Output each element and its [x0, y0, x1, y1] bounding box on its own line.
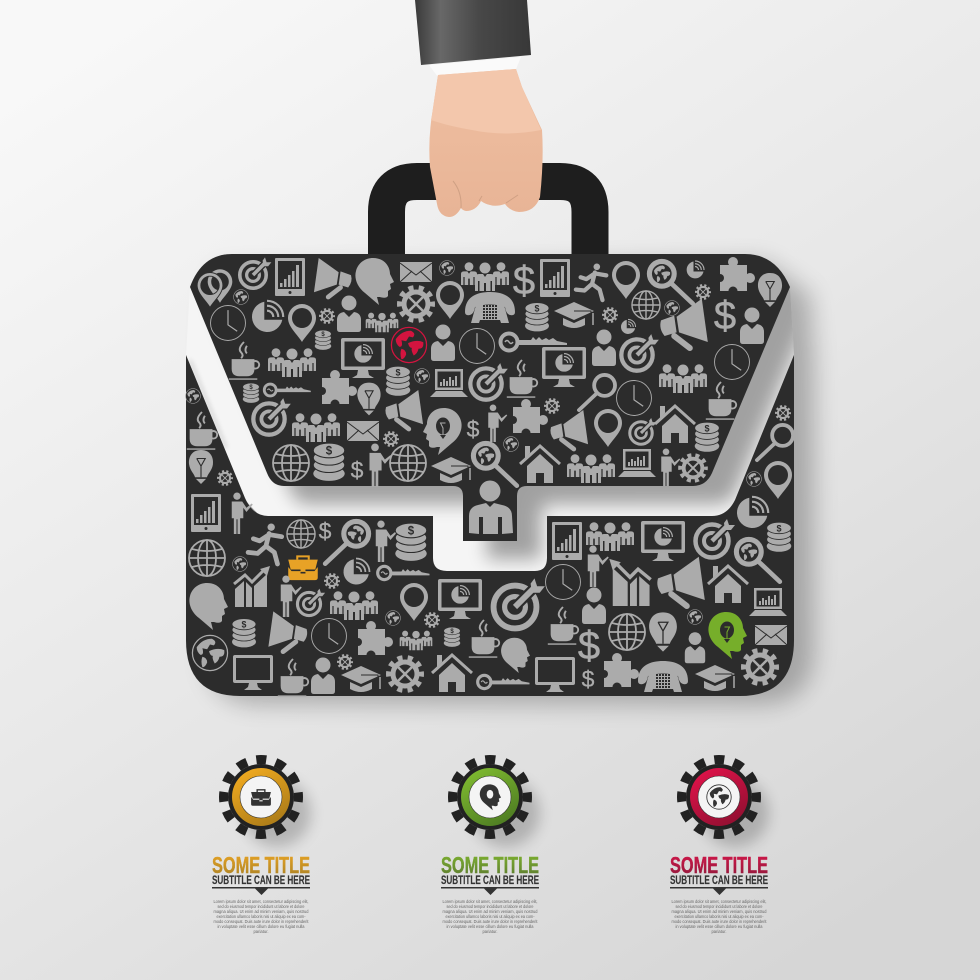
text block: orange	[214, 899, 309, 934]
icon: small gear	[320, 309, 334, 323]
icon: person	[337, 296, 361, 332]
text block: orange: modo consequat. Duis aute irure dolor in reprehenderit	[214, 919, 309, 924]
text block: green: magna aliqua. Ut enim ad minim veniam, quis nostrud	[442, 909, 538, 914]
icon: businessman	[376, 521, 397, 562]
icon: monitor	[341, 338, 385, 378]
gear shadow	[701, 779, 769, 847]
icon: key	[264, 384, 311, 396]
icon: businessman	[661, 448, 680, 486]
icon: target	[253, 398, 291, 435]
icon: team	[330, 591, 378, 620]
whole case shadow	[206, 262, 814, 704]
icon: wire globe	[632, 291, 660, 319]
icon: team	[366, 313, 398, 332]
icon: house	[520, 446, 560, 483]
icon: graduation cap	[431, 457, 471, 483]
icon: magnifier	[579, 375, 615, 410]
icon: person	[311, 658, 335, 694]
icon: dollar: $	[467, 416, 480, 442]
icon: head with bulb	[480, 784, 501, 810]
icon: bulb	[189, 450, 213, 484]
icon: pin	[764, 461, 792, 499]
icon: orange briefcase	[288, 556, 318, 580]
text block: green: exercitation ullamco laboris nisi ut aliquip ex ea com-	[446, 914, 535, 919]
icon: businessman	[588, 546, 609, 587]
icon: red globe	[391, 327, 427, 363]
icon: person	[592, 330, 616, 366]
icon: puzzle	[354, 621, 393, 660]
text block: green: in voluptate velit esse cillum dolore eu fugiat nulla	[446, 924, 534, 929]
icon: team	[586, 522, 634, 551]
icon: magnifier	[736, 539, 780, 582]
icon: businessman	[281, 576, 302, 617]
white disc	[469, 776, 511, 818]
icon: megaphone	[657, 557, 705, 606]
icon: coins	[444, 627, 460, 647]
icon: clock	[617, 381, 651, 415]
icon: runner	[248, 524, 282, 564]
icon: coffee	[469, 620, 499, 657]
icon: target	[630, 418, 657, 444]
icon: businessman	[232, 493, 253, 534]
text block: orange: magna aliqua. Ut enim ad minim veniam, quis nostrud	[214, 909, 309, 914]
title: orange: SOME TITLE	[212, 852, 310, 878]
icon: person	[431, 324, 455, 361]
icon: laptop	[618, 449, 656, 477]
icon: person	[685, 632, 705, 663]
icon: key	[378, 566, 430, 580]
icon: pie	[252, 301, 283, 332]
icon: house	[432, 655, 472, 692]
white disc	[240, 776, 282, 818]
sleeve	[415, 0, 531, 65]
subtitle: red: SUBTITLE CAN BE HERE	[670, 875, 768, 887]
gear shadow	[472, 779, 540, 847]
wrist highlight	[431, 69, 541, 134]
icon: small pie	[687, 261, 704, 278]
icon: pin	[612, 261, 640, 299]
icon: clock	[312, 619, 346, 653]
text block: red: sed do eiusmod tempor incididunt ut labore et dolore	[676, 904, 763, 909]
icon: magnifier	[757, 425, 793, 460]
icon: laptop	[430, 369, 468, 397]
icon: coins	[695, 422, 719, 452]
gap between flap and body	[186, 287, 794, 571]
body	[186, 355, 794, 696]
icon: coins	[315, 330, 331, 350]
icon: small globe	[415, 369, 429, 383]
icon: rising chart	[234, 566, 270, 607]
gear badge: green	[452, 760, 540, 847]
icon: laptop	[749, 588, 787, 616]
icon: dollar: $	[582, 666, 595, 692]
icon: magnifier	[325, 521, 369, 564]
icon: coins	[525, 303, 549, 331]
icon: phone	[465, 292, 515, 323]
icon: coins	[313, 443, 345, 481]
icon: graduation cap	[554, 302, 594, 328]
title: green: SOME TITLE	[441, 852, 539, 878]
left gap soft edge	[190, 360, 226, 448]
divider arrow: green	[441, 887, 539, 895]
icon: small pie	[621, 319, 636, 334]
icon: small gear	[776, 406, 790, 420]
text block: green: modo consequat. Duis aute irure dolor in reprehenderit	[442, 919, 538, 924]
text block: red	[672, 899, 767, 934]
icon: businessman	[488, 404, 507, 442]
text block: green: Lorem ipsum dolor sit amet, consectetur adipiscing elit,	[442, 899, 538, 904]
icon: tablet	[191, 494, 221, 532]
divider arrow: red	[670, 887, 768, 895]
icon: pie	[343, 558, 370, 585]
divider arrow: orange	[212, 887, 310, 895]
icon: gear	[681, 456, 705, 480]
finger creases	[453, 181, 518, 208]
icon: runner	[576, 263, 606, 300]
icon: coins	[767, 522, 791, 552]
icon: monitor	[438, 579, 482, 619]
icon: bulb	[649, 612, 677, 652]
text block: green: pariatur.	[482, 929, 498, 934]
icon: wire globe	[189, 540, 225, 576]
icon: magnifier	[649, 261, 693, 304]
icon: pie	[737, 497, 768, 528]
icon: dollar: $	[319, 518, 332, 544]
text block: orange: Lorem ipsum dolor sit amet, consectetur adipiscing elit,	[214, 899, 308, 904]
icon: small globe	[504, 437, 518, 451]
icon: globe	[192, 635, 228, 671]
icon: clock	[211, 306, 245, 340]
icon: coins	[386, 366, 410, 396]
icon: key	[500, 334, 567, 350]
icon: megaphone	[314, 258, 352, 297]
icon: target	[494, 578, 545, 628]
icon: small gear	[603, 308, 617, 322]
icon: monitor	[233, 655, 273, 690]
icon: envelope	[400, 262, 432, 282]
text block: red: in voluptate velit esse cillum dolore eu fugiat nulla	[676, 924, 763, 929]
icon: clock	[546, 565, 580, 599]
icon: phone	[638, 661, 688, 692]
gear badge: red	[682, 760, 769, 847]
icon: coffee	[229, 342, 259, 379]
icon: briefcase	[251, 790, 271, 806]
icon: monitor	[641, 521, 685, 561]
icon: head	[189, 583, 228, 630]
icon: dollar: $	[578, 624, 600, 668]
briefcase	[186, 182, 814, 704]
icon: small globe	[747, 472, 761, 486]
flap shadow in the gap	[276, 287, 794, 570]
icon: wire globe	[609, 614, 645, 650]
icon: gear	[400, 288, 432, 320]
icon: pin	[436, 281, 464, 319]
icon: puzzle	[716, 257, 755, 296]
white disc	[698, 776, 740, 818]
text block: orange: pariatur.	[254, 929, 268, 934]
icon: target	[696, 519, 735, 558]
icon: megaphone	[660, 299, 708, 348]
icon: pin	[400, 583, 428, 621]
icon: double pin	[197, 269, 232, 307]
icon: key	[478, 675, 530, 689]
icon: small gear	[218, 471, 232, 485]
icon: small gear	[325, 574, 339, 588]
icon: puzzle	[509, 399, 548, 438]
icon: monitor	[535, 657, 575, 692]
icon: globe	[707, 785, 731, 809]
flap	[190, 254, 790, 541]
icon: small globe	[440, 261, 454, 275]
text block: red: pariatur.	[712, 929, 726, 934]
icon: head	[355, 258, 394, 305]
icon: monitor	[542, 347, 586, 387]
icon: small gear	[384, 432, 398, 446]
icon: dollar: $	[513, 259, 535, 303]
icon: wire globe	[287, 520, 315, 548]
text block: orange: in voluptate velit esse cillum dolore eu fugiat nulla	[218, 924, 305, 929]
icon: graduation cap	[341, 666, 381, 692]
hand with sleeve	[415, 0, 543, 217]
icon: small gear	[696, 285, 710, 299]
text block: green: sed do eiusmod tempor incididunt ut labore et dolore	[446, 904, 534, 909]
icon: target	[621, 334, 659, 371]
icon: coffee	[548, 607, 578, 644]
handle	[386, 182, 590, 256]
icon: pin	[288, 304, 316, 342]
icon: dollar: $	[714, 294, 736, 338]
text block: red: exercitation ullamco laboris nisi ut aliquip ex ea com-	[674, 914, 764, 919]
gear	[457, 764, 523, 830]
icon: megaphone	[268, 611, 307, 652]
icon: small gear	[545, 399, 559, 413]
icon: clasp person	[469, 480, 513, 534]
icon: dollar: $	[351, 457, 364, 483]
color ring	[232, 768, 290, 826]
icon: team	[292, 413, 340, 442]
gear	[228, 764, 294, 830]
icon: bulb	[357, 383, 381, 415]
icon: person	[582, 588, 606, 624]
icon: graduation cap	[695, 665, 735, 691]
icon: envelope	[347, 421, 379, 441]
icon: wire globe	[273, 445, 309, 481]
icon: small gear	[338, 655, 352, 669]
icon: team	[400, 631, 432, 650]
icon: coins	[243, 383, 259, 403]
icon: clock	[460, 329, 494, 363]
icon: small globe	[665, 301, 679, 315]
gear shadow	[243, 779, 311, 847]
icon: head with bulb	[423, 408, 462, 455]
icon: bulb	[758, 273, 782, 307]
icon: envelope	[755, 625, 787, 645]
icon: team	[567, 454, 615, 483]
icon: team	[659, 364, 707, 393]
icon: team	[461, 262, 509, 291]
icon: target	[240, 257, 271, 288]
text block: red: magna aliqua. Ut enim ad minim veniam, quis nostrud	[672, 909, 767, 914]
text block: green	[442, 899, 538, 934]
text block: orange: exercitation ullamco laboris nisi ut aliquip ex ea com-	[216, 914, 306, 919]
gear badge: orange	[224, 760, 311, 847]
icon: tablet	[552, 522, 582, 560]
icon: person	[740, 308, 764, 344]
icon: small gear	[425, 613, 439, 627]
icon: puzzle	[318, 370, 357, 408]
title: red: SOME TITLE	[670, 852, 768, 878]
gear	[686, 764, 752, 830]
icon: small globe	[386, 611, 400, 625]
icon: coffee	[507, 360, 537, 397]
icon: gear	[744, 651, 776, 683]
text block: orange: sed do eiusmod tempor incididunt ut labore et dolore	[218, 904, 305, 909]
icon: gear	[389, 658, 421, 690]
icon: small globe	[186, 389, 200, 403]
icon: clock	[715, 345, 749, 379]
icon: pin	[594, 409, 622, 447]
white cuff	[429, 57, 521, 77]
icon: coins	[395, 523, 427, 561]
subtitle: orange: SUBTITLE CAN BE HERE	[212, 875, 310, 887]
icon: head	[501, 638, 530, 673]
color ring	[690, 768, 748, 826]
icon: megaphone	[385, 390, 423, 429]
icon: target	[470, 363, 508, 400]
text block: red: Lorem ipsum dolor sit amet, consectetur adipiscing elit,	[672, 899, 766, 904]
icon: coffee	[278, 659, 308, 696]
icon: tablet	[540, 259, 570, 297]
icon: target	[297, 589, 325, 616]
icon: green head	[708, 612, 747, 659]
icon: businessman	[370, 444, 392, 487]
hand	[429, 69, 543, 217]
icon: magnifier	[473, 443, 517, 486]
icon: falling chart	[609, 559, 651, 606]
icon: house	[708, 566, 748, 603]
icon field	[186, 257, 793, 696]
icon: small globe	[233, 557, 247, 571]
icon: small globe	[688, 610, 702, 624]
icon: small globe	[234, 290, 248, 304]
icon: coffee	[187, 412, 217, 449]
icon: wire globe	[390, 445, 426, 481]
icon: megaphone	[550, 410, 588, 449]
subtitle: green: SUBTITLE CAN BE HERE	[441, 875, 539, 887]
icon: puzzle	[600, 653, 639, 692]
icon: coins	[232, 619, 256, 647]
icon: coffee	[706, 382, 736, 419]
icon: team	[268, 348, 316, 377]
color ring	[461, 768, 519, 826]
text block: red: modo consequat. Duis aute irure dolor in reprehenderit	[672, 919, 767, 924]
icon: tablet	[275, 258, 305, 296]
icon: house	[655, 406, 695, 443]
